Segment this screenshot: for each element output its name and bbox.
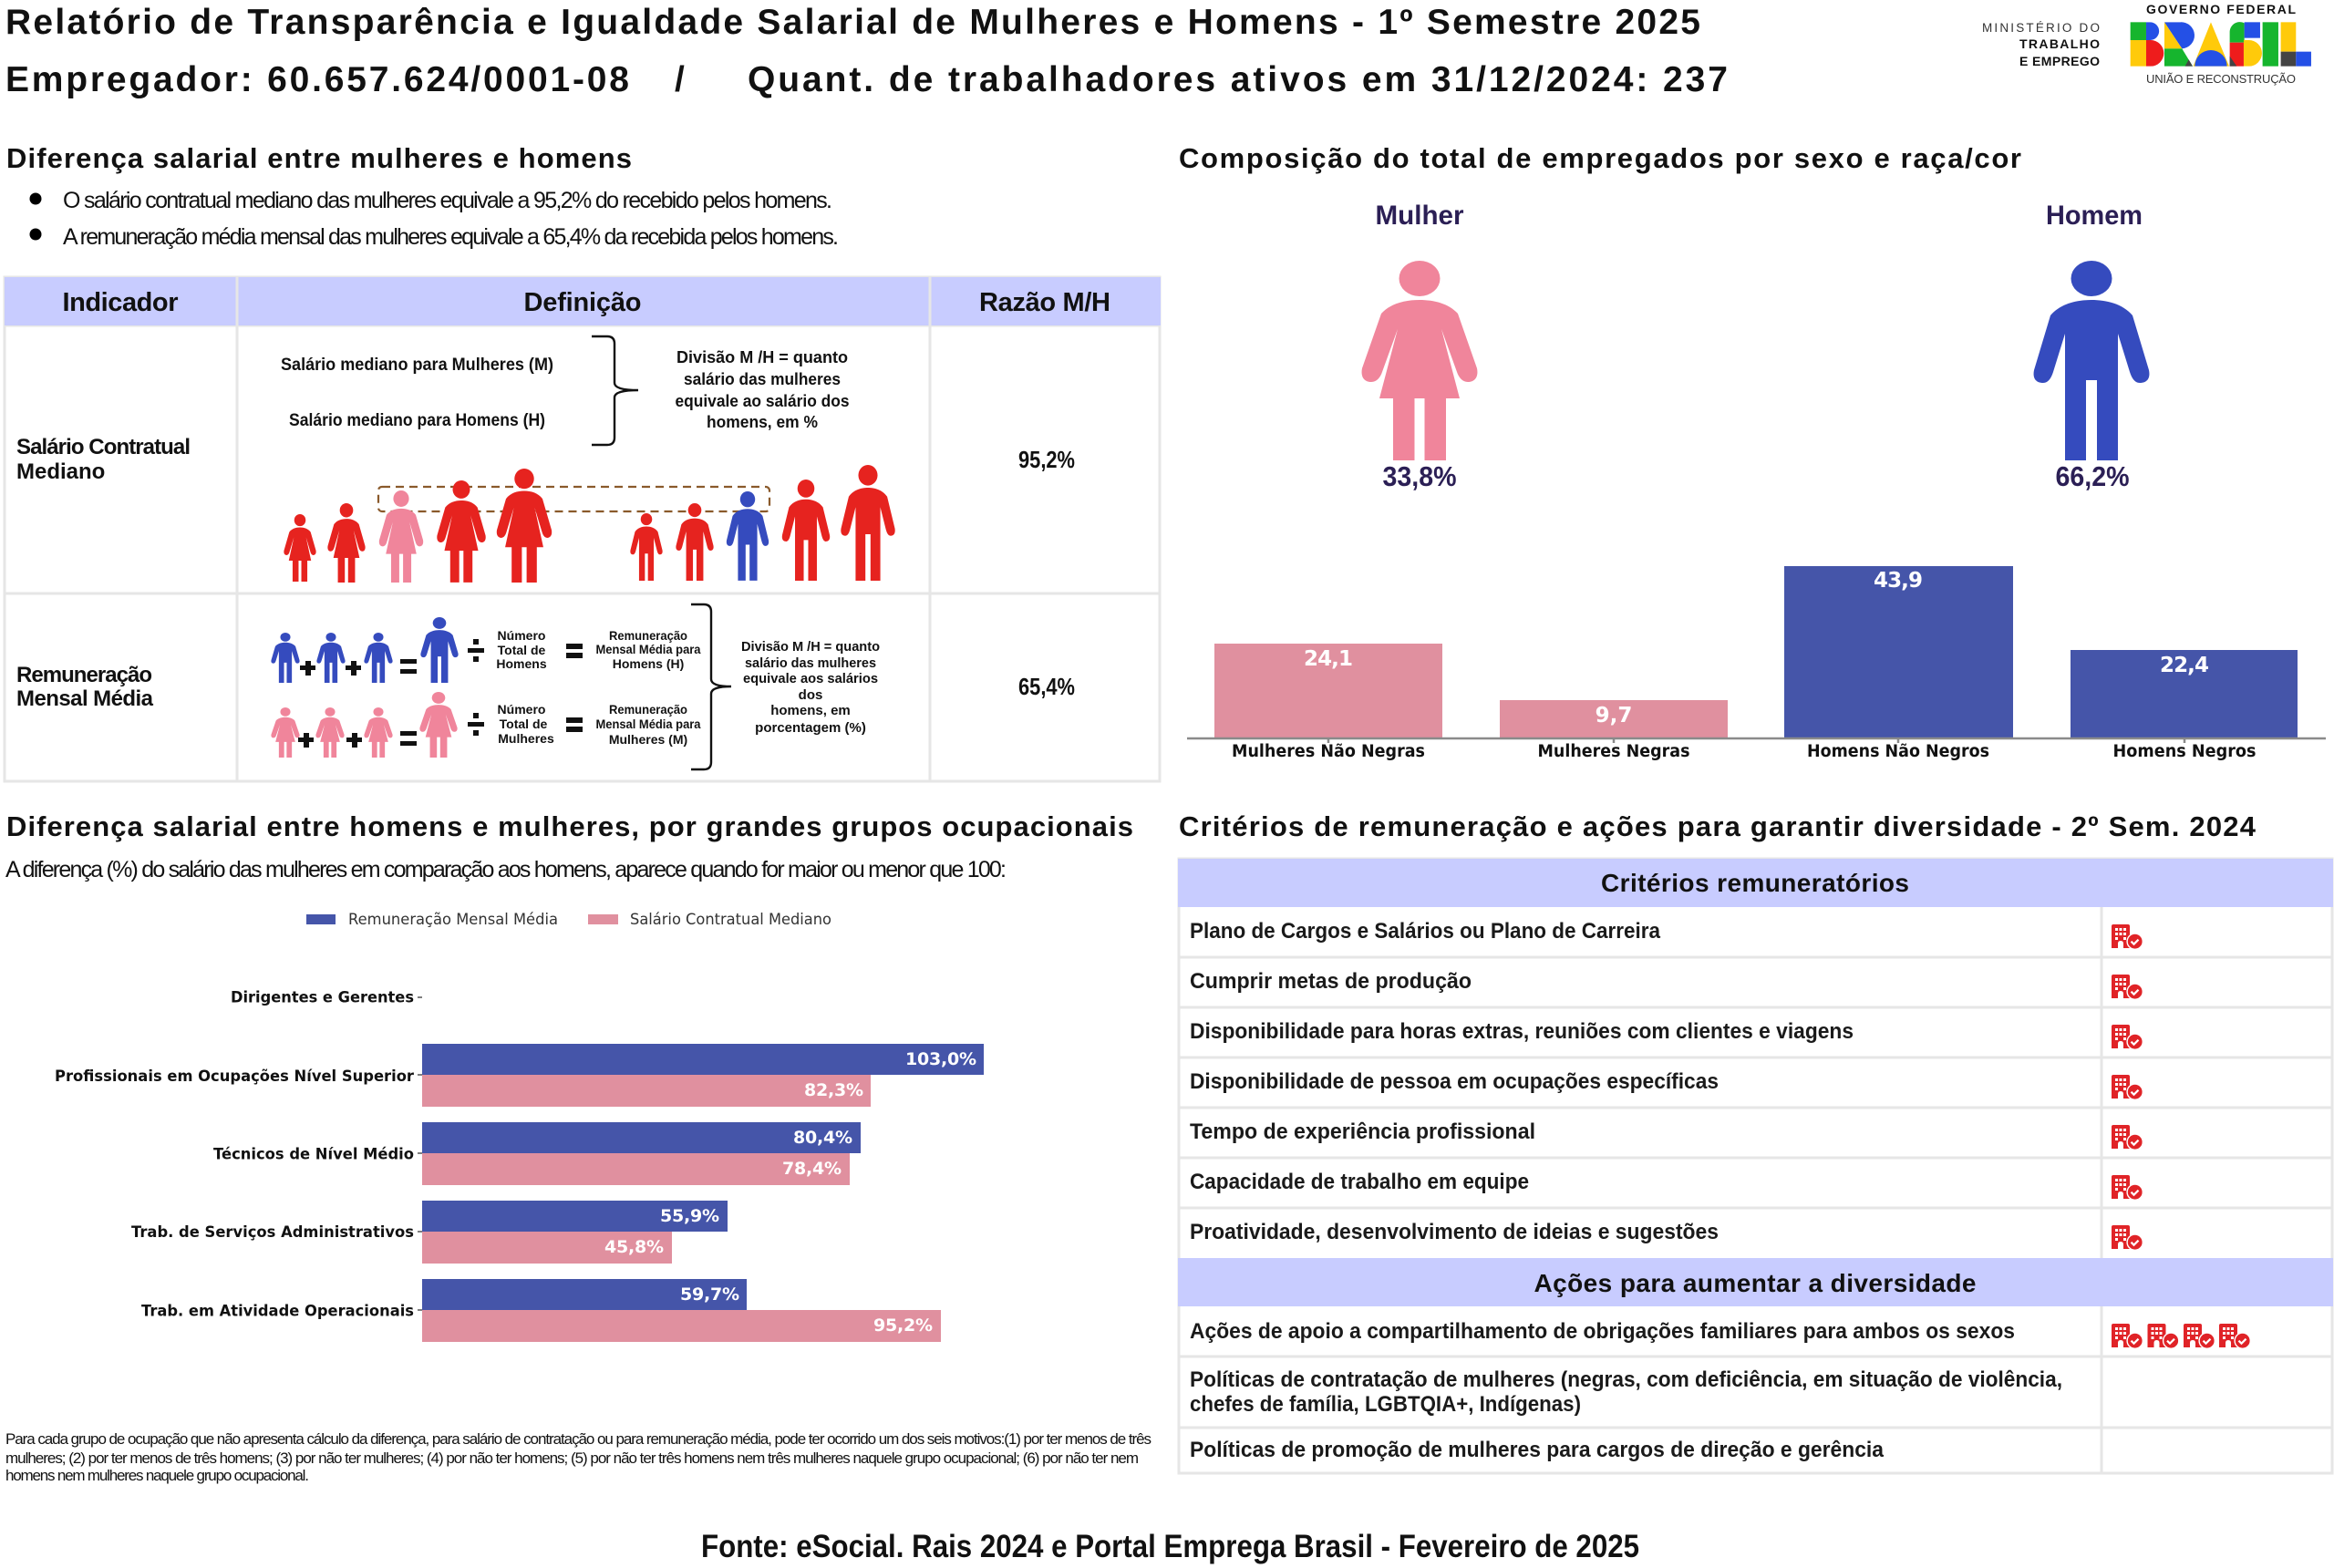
criteria rows text: Cumprir metas de produção: [1190, 969, 1472, 994]
criteria rows text: Disponibilidade para horas extras, reuniões com clientes e viagens: [1190, 1019, 1854, 1044]
icons: women ordered by salary: [284, 469, 552, 583]
bar chart: sex and race: [1187, 566, 2326, 761]
text: average division explanation: [741, 639, 880, 736]
legend: [306, 911, 831, 929]
text: men average equation: Homens: [496, 656, 547, 671]
text: median division explanation: salário das mulheres: [684, 370, 841, 388]
text: average division explanation: equivale aos salários: [743, 671, 878, 686]
heading: occupational groups: Diferença salarial entre homens e mulheres, por grandes grupos ocupacionais: [6, 810, 1133, 842]
text: men average equation: Mensal Média para: [596, 642, 701, 656]
bar chart: ratio by occupational group: 59,7%: [680, 1284, 739, 1305]
table header: pay criteria: [1178, 859, 2333, 907]
text: women average equation: Número: [498, 702, 545, 717]
text: men average equation: Total de: [498, 643, 546, 657]
footnote: homens nem mulheres naquele grupo ocupacional.: [5, 1467, 309, 1484]
dashed median highlight: [378, 487, 769, 511]
bar chart: sex and race: 43,9: [1874, 569, 1923, 593]
heading: criteria and actions: Critérios de remuneração e ações para garantir diversidade - 2º Sem. 2024: [1179, 810, 2257, 842]
text: average division explanation: Divisão M /H = quanto: [741, 639, 880, 655]
icons: men average equation: [271, 617, 583, 683]
source note: Fonte: eSocial. Rais 2024 e Portal Emprega Brasil - Fevereiro de 2025: [701, 1529, 1639, 1564]
panel: pay criteria and diversity actions: [1178, 810, 2333, 1473]
panel: indicators table: [5, 277, 1161, 781]
text: men average equation: Remuneração: [609, 628, 687, 643]
figure: men share: Homem: [2046, 201, 2143, 231]
text: women average equation: Mensal Média para: [596, 717, 701, 731]
text: average division explanation: dos: [799, 687, 822, 703]
figure: women share: 33,8%: [1382, 460, 1457, 492]
criteria rows text: Capacidade de trabalho em equipe: [1190, 1170, 1529, 1194]
text: women average equation: Mulheres: [498, 731, 554, 746]
text: median division explanation: homens, em %: [707, 413, 818, 431]
bar chart: ratio by occupational group: 78,4%: [782, 1159, 842, 1179]
bar chart: sex and race: Mulheres Não Negras: [1232, 742, 1425, 761]
text: women average equation: Mulheres (M): [609, 732, 687, 747]
actions rows text: Políticas de contratação de mulheres (negras, com deficiência, em situação de violência,: [1190, 1367, 2062, 1392]
bar chart: ratio by occupational group: 80,4%: [793, 1128, 852, 1148]
bar chart: ratio by occupational group: 55,9%: [660, 1206, 719, 1226]
table header row: [5, 277, 1161, 325]
subtitle: employer and number of workers: /: [675, 60, 685, 99]
bar chart: sex and race: 22,4: [2160, 654, 2209, 677]
text: median division explanation: equivale ao salário dos: [675, 392, 850, 410]
logo: Governo Federal Brasil: [2131, 2, 2311, 86]
figure: women share: [1362, 201, 1477, 492]
logo: Ministério do Trabalho e Emprego: MINISTÉRIO DO: [1982, 21, 2100, 35]
figure: men share: 66,2%: [2055, 460, 2130, 492]
subtitle: employer and number of workers: [5, 60, 1728, 99]
bar chart: ratio by occupational group: 82,3%: [804, 1080, 863, 1100]
text: men average equation: Número: [498, 628, 545, 643]
footnote: mulheres; (2) por ter menos de três homens; (3) por não ter mulheres; (4) por não ter homens; (5) por não ter três homens nem três mulheres naquele grupo ocupacional; (6) por não ter nem: [5, 1449, 1139, 1467]
bar chart: sex and race: 24,1: [1304, 647, 1353, 671]
text: men average equation: [496, 628, 701, 671]
logo: Governo Federal Brasil: GOVERNO FEDERAL: [2146, 2, 2296, 16]
bullet: median contractual salary: O salário contratual mediano das mulheres equivale a 95,2% do recebido pelos homens.: [63, 188, 832, 213]
actions rows text: Políticas de promoção de mulheres para cargos de direção e gerência: [1190, 1438, 1885, 1462]
panel: salary difference summary: [6, 142, 839, 250]
criteria rows text: Plano de Cargos e Salários ou Plano de Carreira: [1190, 919, 1661, 944]
legend: Remuneração Mensal Média: [348, 911, 558, 929]
bar chart: ratio by occupational group: 95,2%: [873, 1315, 933, 1336]
icons: criteria adopted: [2112, 924, 2143, 1250]
table header row: Definição: [523, 288, 642, 317]
row label: median contractual salary: Salário Contratual: [16, 435, 191, 459]
row label: median contractual salary: Mediano: [16, 459, 105, 484]
criteria rows text: Tempo de experiência profissional: [1190, 1119, 1535, 1144]
bar chart: sex and race: Homens Não Negros: [1807, 742, 1989, 761]
heading: composition: Composição do total de empregados por sexo e raça/cor: [1179, 142, 2021, 174]
text: women average equation: Total de: [500, 717, 548, 731]
text: average division explanation: porcentagem (%): [755, 720, 866, 736]
table header: pay criteria: Critérios remuneratórios: [1601, 869, 1909, 897]
panel: workforce composition: [1179, 142, 2326, 761]
panel: occupational groups: [5, 810, 1152, 1484]
actions rows text: [1190, 1319, 2062, 1462]
actions rows text: chefes de família, LGBTQIA+, Indígenas): [1190, 1392, 1581, 1417]
text: men average equation: Homens (H): [613, 656, 684, 671]
criteria rows text: [1190, 919, 1854, 1244]
row label: average monthly pay: Mensal Média: [16, 686, 154, 711]
bar chart: ratio by occupational group: Dirigentes e Gerentes: [231, 988, 414, 1006]
logo: Ministério do Trabalho e Emprego: TRABALHO: [2019, 36, 2100, 51]
bar chart: ratio by occupational group: [55, 988, 984, 1342]
bar chart: ratio by occupational group: 103,0%: [905, 1049, 976, 1069]
text: average division explanation: homens, em: [770, 703, 851, 718]
bar chart: sex and race: 9,7: [1596, 704, 1632, 727]
row label: median contractual salary: [16, 435, 191, 484]
bracket: median salary: [592, 336, 638, 445]
figure: men share: [2034, 201, 2149, 492]
actions rows text: Ações de apoio a compartilhamento de obrigações familiares para ambos os sexos: [1190, 1319, 2015, 1344]
bar chart: sex and race: Mulheres Negras: [1537, 742, 1690, 761]
text: average division explanation: salário das mulheres: [745, 655, 876, 671]
bullet: average monthly pay: A remuneração média mensal das mulheres equivale a 65,4% da recebida pelos homens.: [63, 224, 839, 250]
subtitle: employer and number of workers: Empregador: 60.657.624/0001-08: [5, 60, 629, 99]
title: report heading: Relatório de Transparência e Igualdade Salarial de Mulheres e Homens - 1º Semestre 2025: [5, 3, 1700, 42]
bar chart: ratio by occupational group: Profissionais em Ocupações Nível Superior: [55, 1068, 415, 1085]
definition text: median salary for women and men: [281, 356, 553, 430]
table header: diversity actions: Ações para aumentar a diversidade: [1534, 1269, 1977, 1297]
table header row: Razão M/H: [979, 288, 1110, 317]
definition text: median salary for women and men: Salário mediano para Homens (H): [289, 411, 545, 430]
logo: Governo Federal Brasil: UNIÃO E RECONSTRUÇÃO: [2146, 72, 2296, 86]
legend: Salário Contratual Mediano: [630, 911, 831, 929]
ratio: median contractual salary: 95,2%: [1018, 446, 1075, 473]
icons: men ordered by salary: [630, 465, 895, 581]
bar chart: ratio by occupational group: 45,8%: [604, 1237, 664, 1257]
row label: average monthly pay: [16, 663, 154, 711]
bar chart: ratio by occupational group: Técnicos de Nível Médio: [213, 1145, 414, 1163]
icons: women average equation: [271, 692, 583, 758]
logo: Ministério do Trabalho e Emprego: [1982, 21, 2100, 68]
table header row: Indicador: [62, 288, 179, 317]
criteria rows text: Proatividade, desenvolvimento de ideias e sugestões: [1190, 1220, 1719, 1244]
footnote: Para cada grupo de ocupação que não apresenta cálculo da diferença, para salário de contratação ou para remuneração média, pode ter ocorrido um dos seis motivos:(1) por ter menos de três: [5, 1430, 1152, 1448]
row label: average monthly pay: Remuneração: [16, 663, 152, 687]
text: women average equation: Remuneração: [609, 702, 687, 717]
figure: women share: Mulher: [1375, 201, 1464, 231]
definition text: median salary for women and men: Salário mediano para Mulheres (M): [281, 356, 553, 375]
criteria rows text: Disponibilidade de pessoa em ocupações específicas: [1190, 1069, 1719, 1094]
icons: actions adopted: [2112, 1324, 2250, 1348]
bar chart: ratio by occupational group: Trab. em Atividade Operacionais: [141, 1302, 414, 1320]
text: median division explanation: [675, 348, 850, 431]
table header: diversity actions: [1178, 1258, 2333, 1306]
bar chart: sex and race: Homens Negros: [2113, 742, 2256, 761]
text: women average equation: [498, 702, 701, 747]
subtitle: employer and number of workers: Quant. de trabalhadores ativos em 31/12/2024: 237: [748, 60, 1728, 99]
text: median division explanation: Divisão M /H = quanto: [676, 348, 848, 366]
footnote: [5, 1430, 1152, 1484]
heading: salary difference: Diferença salarial entre mulheres e homens: [6, 142, 632, 174]
logo: Ministério do Trabalho e Emprego: E EMPREGO: [2019, 54, 2100, 68]
bracket: average pay: [691, 604, 731, 769]
ratio: average monthly pay: 65,4%: [1018, 673, 1075, 700]
text: chart explanation: A diferença (%) do salário das mulheres em comparação aos homens, aparece quando for maior ou menor que 100:: [5, 857, 1007, 882]
bar chart: ratio by occupational group: Trab. de Serviços Administrativos: [131, 1223, 414, 1241]
